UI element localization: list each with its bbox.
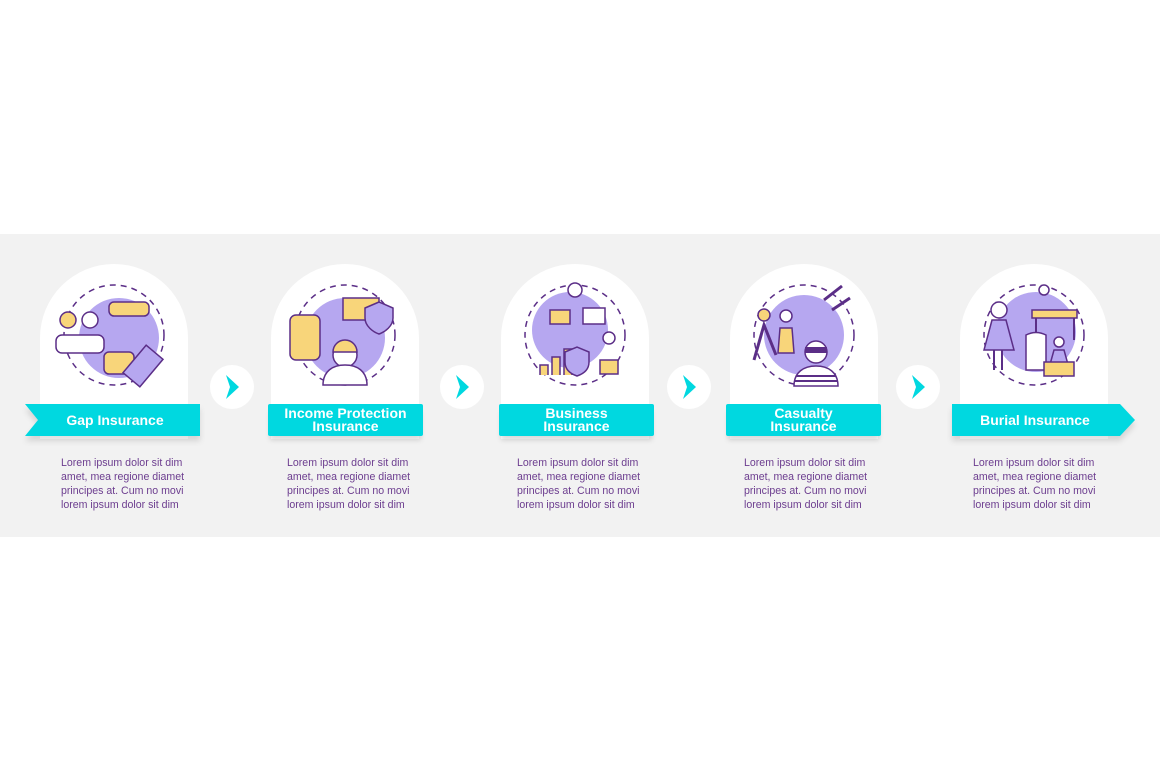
- ribbon: Casualty: Casualty: [774, 405, 833, 421]
- card 1: [40, 264, 188, 439]
- ribbon: Business: [499, 404, 654, 436]
- ribbon: Income Protection: [268, 404, 423, 436]
- text 2: Lorem ipsum dolor sit dim amet, mea regione diamet principes at. Cum no movi lorem ipsum dolor sit dim: [287, 457, 410, 511]
- text 1: Lorem ipsum dolor sit dim amet, mea regione diamet principes at. Cum no movi lorem ipsum dolor sit dim: [61, 457, 184, 511]
- ribbon: Income Protection: Insurance: [312, 418, 379, 434]
- background band: [0, 234, 1160, 537]
- arrow 1: [210, 365, 254, 409]
- arrow 2: [440, 365, 484, 409]
- icon: business: [524, 282, 626, 386]
- ribbon: Burial Insurance: [950, 404, 1135, 442]
- text 4: Lorem ipsum dolor sit dim amet, mea regione diamet principes at. Cum no movi lorem ipsum dolor sit dim: [744, 457, 867, 511]
- ribbon: Gap Insurance: [25, 404, 202, 442]
- arrow 4: [896, 365, 940, 409]
- ribbon: Burial Insurance: Burial Insurance: [980, 412, 1090, 428]
- ribbon: Casualty: [726, 404, 881, 436]
- card 5: [960, 264, 1108, 439]
- card 2: [271, 264, 419, 439]
- arrow 3: [667, 365, 711, 409]
- icon: burial: [983, 284, 1085, 386]
- card 4: [730, 264, 878, 439]
- icon: casualty: [752, 284, 855, 387]
- ribbon: Business: Insurance: [543, 418, 610, 434]
- text 5: Lorem ipsum dolor sit dim amet, mea regione diamet principes at. Cum no movi lorem ipsum dolor sit dim: [973, 457, 1096, 511]
- ribbon: Casualty: Insurance: [770, 418, 837, 434]
- ribbon: Income Protection: Income Protection: [284, 405, 407, 421]
- icon: gap insurance: [55, 284, 165, 388]
- ribbon: Gap Insurance: Gap Insurance: [66, 412, 164, 428]
- ribbon: Business: Business: [545, 405, 608, 421]
- text 3: Lorem ipsum dolor sit dim amet, mea regione diamet principes at. Cum no movi lorem ipsum dolor sit dim: [517, 457, 640, 511]
- card 3: [501, 264, 649, 439]
- icon: income protection: [289, 284, 396, 386]
